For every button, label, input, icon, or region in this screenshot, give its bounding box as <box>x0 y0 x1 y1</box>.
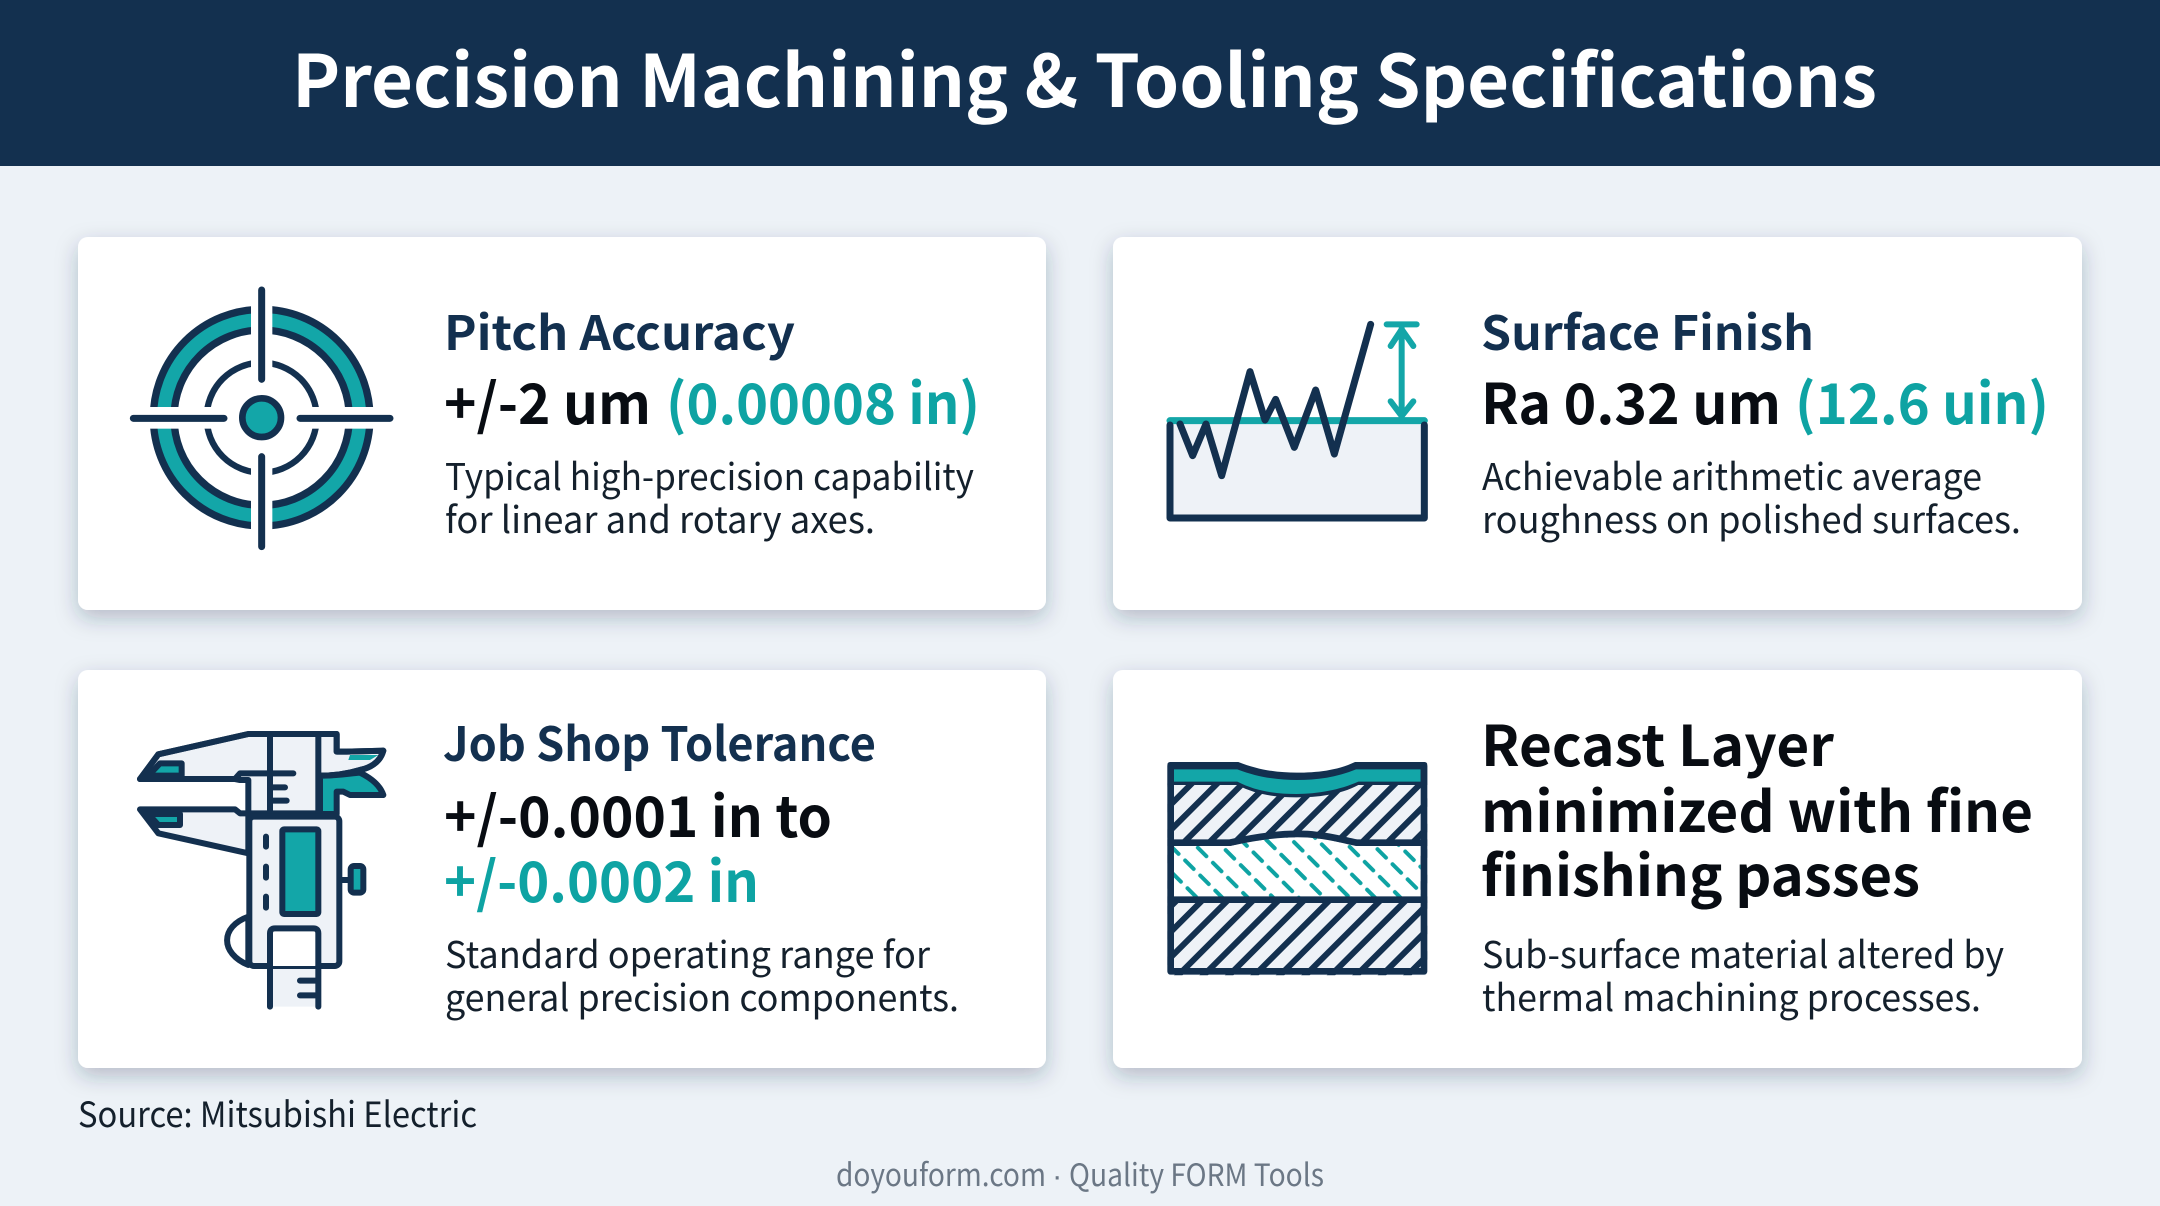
heading: Surface Finish <box>1481 295 1814 364</box>
title: Precision Machining & Tooling Specifications <box>292 23 1877 128</box>
heading: Recast Layer <box>1481 702 1835 783</box>
description: Standard operating range for <box>445 925 931 979</box>
description: Sub-surface material altered by <box>1482 925 2004 979</box>
heading line 3: finishing passes <box>1481 832 1920 913</box>
icon: material cross-section layers <box>1167 762 1427 975</box>
heading: Pitch Accuracy <box>444 295 795 364</box>
source note: Source: Mitsubishi Electric <box>78 1087 477 1138</box>
heading: Job Shop Tolerance <box>443 706 876 775</box>
icon: target crosshair <box>133 290 390 547</box>
icon: surface roughness profile <box>1170 324 1424 518</box>
footer credit: Quality FORM Tools <box>1069 1150 1324 1195</box>
header banner <box>0 0 2160 166</box>
description: Typical high-precision capability <box>445 447 974 501</box>
footer credit: doyouform.com <box>836 1150 1046 1195</box>
description: thermal machining processes. <box>1482 968 1981 1022</box>
description: Achievable arithmetic average <box>1482 447 1982 501</box>
description: roughness on polished surfaces. <box>1482 490 2021 544</box>
panel: recast layer <box>1113 670 2082 1068</box>
description: for linear and rotary axes. <box>445 490 875 544</box>
footer credit: · <box>1052 1158 1062 1193</box>
value in inches: (0.00008 in) <box>666 360 980 441</box>
icon: caliper <box>140 734 383 1007</box>
value in microinches: (12.6 uin) <box>1795 360 2049 441</box>
footer credit <box>836 1150 1324 1195</box>
value: +/-2 um <box>444 360 651 441</box>
description: general precision components. <box>445 968 959 1022</box>
panel: pitch accuracy <box>78 237 1046 610</box>
value range: +/-0.0001 in to <box>444 773 832 854</box>
value upper limit: +/-0.0002 in <box>444 838 759 919</box>
panel: job shop tolerance <box>78 670 1046 1068</box>
panel: surface finish <box>1113 237 2082 610</box>
heading line 2: minimized with fine <box>1481 768 2033 849</box>
value: Ra 0.32 um <box>1481 360 1781 441</box>
